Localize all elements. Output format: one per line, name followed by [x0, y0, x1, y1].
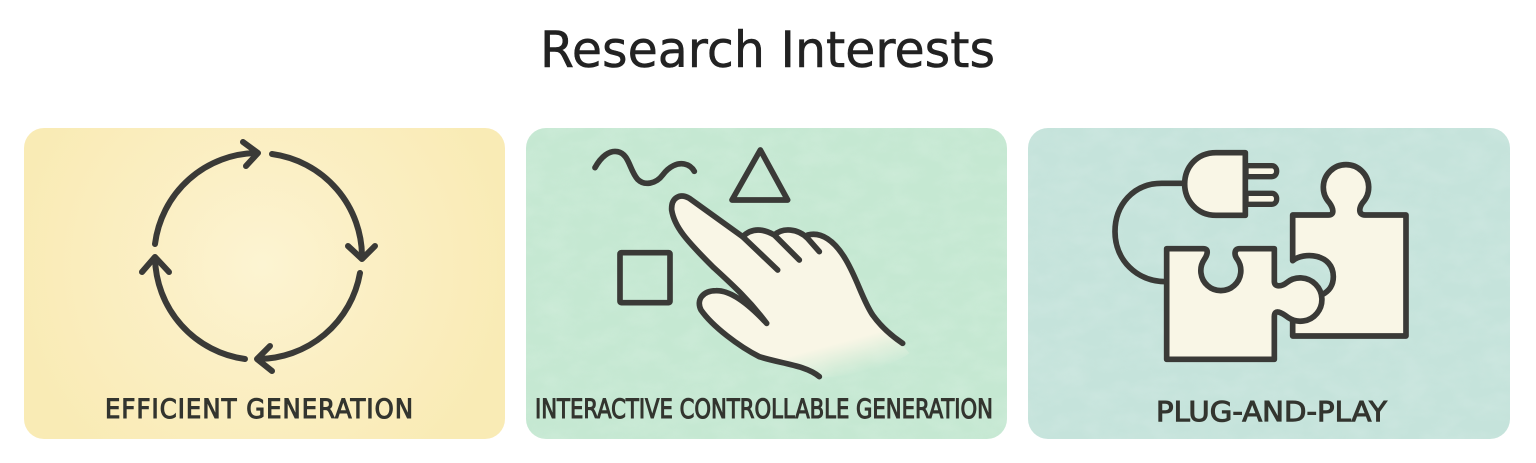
cord: [1115, 183, 1184, 282]
square: [620, 253, 670, 303]
squiggle: [595, 151, 694, 183]
label: plug-and-play: PLUG-AND-PLAY: [1156, 395, 1388, 428]
panel: efficient generation: [24, 128, 505, 439]
hand fill: [671, 195, 909, 377]
plug prongs: [1246, 166, 1277, 177]
plug body: [1185, 153, 1245, 215]
label: interactive controllable generation: INTERACTIVE CONTROLLABLE GENERATION: [535, 394, 993, 425]
triangle: [732, 150, 788, 200]
hand outline: [672, 196, 903, 377]
label: efficient generation: EFFICIENT GENERATION: [105, 394, 413, 425]
icon: plug and puzzle pieces: [1115, 153, 1406, 359]
puzzle piece left: [1167, 249, 1322, 359]
title: Research Interests: [540, 21, 995, 79]
icon: pointing hand with shapes: [595, 150, 909, 377]
panel: interactive controllable generation: [526, 128, 1007, 439]
panel: plug-and-play: [1028, 128, 1510, 439]
icon: cycle of four arrows: [142, 142, 375, 371]
puzzle piece right: [1293, 165, 1406, 336]
